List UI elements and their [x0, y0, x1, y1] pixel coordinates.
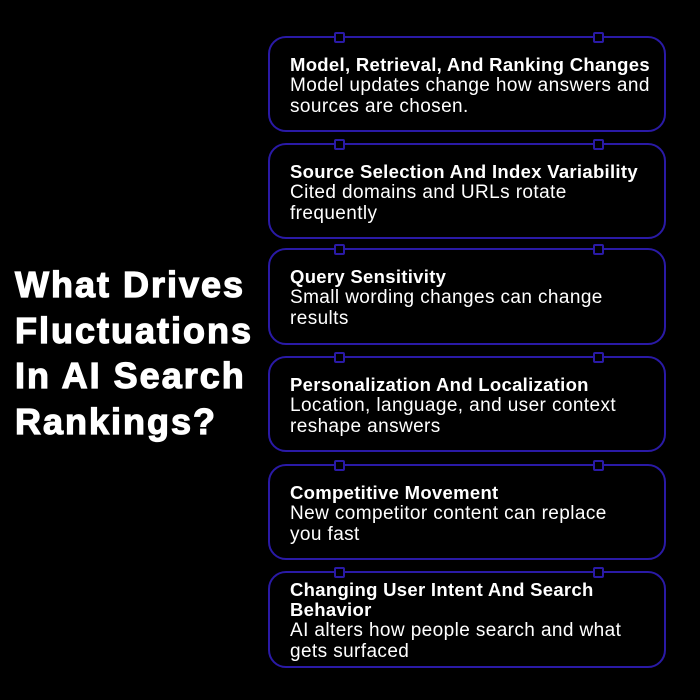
card: competitive movement	[268, 464, 666, 560]
card: query sensitivity: Query Sensitivity	[290, 266, 446, 287]
card: model changes: sources are chosen.	[290, 96, 469, 117]
card: personalization: Location, language, and user context	[290, 395, 616, 416]
card: user intent: gets surfaced	[290, 641, 409, 662]
card: source selection: Source Selection And Index Variability	[290, 161, 638, 182]
card: source selection: frequently	[290, 203, 377, 224]
card: model changes	[268, 36, 666, 132]
card: competitive movement: New competitor content can replace	[290, 503, 607, 524]
card: user intent: AI alters how people search and what	[290, 620, 621, 641]
card: source selection	[268, 143, 666, 239]
card: query sensitivity: Small wording changes can change	[290, 287, 603, 308]
card: user intent: Changing User Intent And Search	[290, 579, 594, 600]
card: user intent: Behavior	[290, 599, 372, 620]
title: Fluctuations	[15, 310, 253, 350]
title	[14, 264, 253, 442]
card: query sensitivity: results	[290, 308, 349, 329]
card: source selection: Cited domains and URLs rotate	[290, 182, 567, 203]
card: personalization: reshape answers	[290, 416, 441, 437]
card: query sensitivity	[268, 248, 666, 345]
card: personalization	[268, 356, 666, 452]
title: In AI Search	[15, 355, 246, 396]
card: model changes: Model updates change how answers and	[290, 75, 650, 96]
title: Rankings?	[15, 400, 217, 442]
card: competitive movement: Competitive Movement	[290, 482, 499, 503]
card: competitive movement: you fast	[290, 524, 360, 545]
card: user intent	[268, 571, 666, 668]
card: model changes: Model, Retrieval, And Ranking Changes	[290, 54, 650, 75]
title: What Drives	[15, 264, 245, 305]
card: personalization: Personalization And Localization	[290, 374, 589, 395]
